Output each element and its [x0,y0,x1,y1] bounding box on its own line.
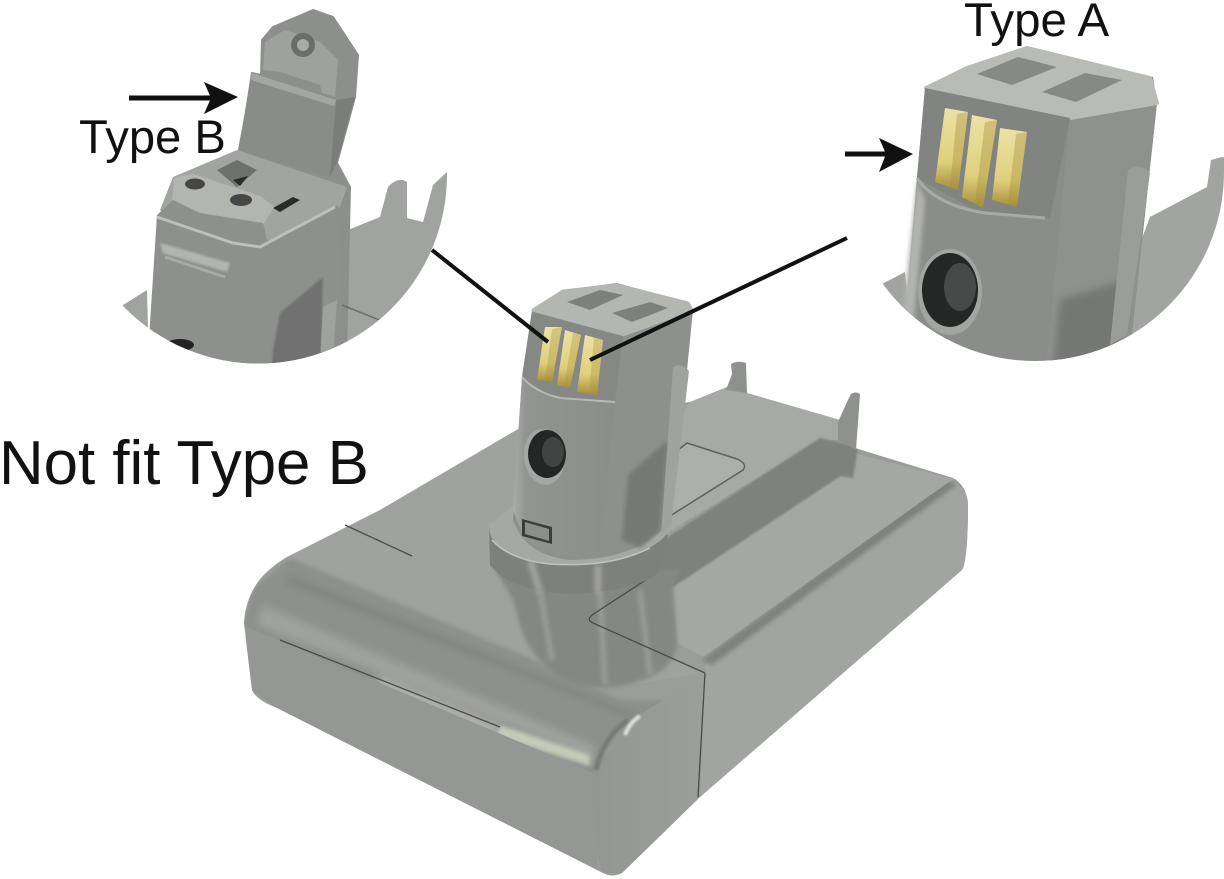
front lower face [240,627,603,879]
jack hole edge [169,339,194,350]
pointer line to Type B [432,250,548,342]
lens hole [918,249,982,335]
inner panel [672,442,746,516]
back tabs [726,362,860,450]
top face [533,285,692,335]
side rib [1110,167,1150,345]
top deck [160,150,347,240]
top face [926,48,1157,118]
sockets [977,57,1122,102]
battery body [240,387,975,879]
recess around contacts [917,88,1070,218]
battery stem [513,283,693,560]
seam lines [280,525,705,797]
inset: Type B close-up [123,9,447,364]
plateau [673,452,953,657]
right side face [700,478,975,800]
inset: Type A close-up [880,47,1224,380]
flange [123,172,447,349]
left highlight [904,181,926,318]
front rounded band [244,558,661,774]
top left face [288,429,518,557]
indicator window [522,519,552,544]
band streaks [258,605,596,760]
gold contacts [935,108,1027,208]
top sockets [567,290,668,322]
Type A arrow [845,138,913,172]
main battery [240,283,975,879]
dark channel [640,438,858,587]
pointer line to Type A [590,238,847,360]
collar [489,500,668,594]
front corner [622,695,703,873]
Type B arrow [129,82,238,114]
lower body [150,200,343,364]
side rib [661,365,689,536]
lens hole [520,426,568,488]
gold contacts [537,327,603,395]
Type B label: Type B [79,111,226,164]
front upper recess [522,312,623,402]
top plate with screws [173,175,273,223]
back panel [674,388,838,523]
title: Not fit Type B: Not fit Type B [0,429,369,498]
stem reflection [495,570,680,688]
flange [882,157,1224,336]
module body [906,76,1157,361]
tower [206,9,359,364]
